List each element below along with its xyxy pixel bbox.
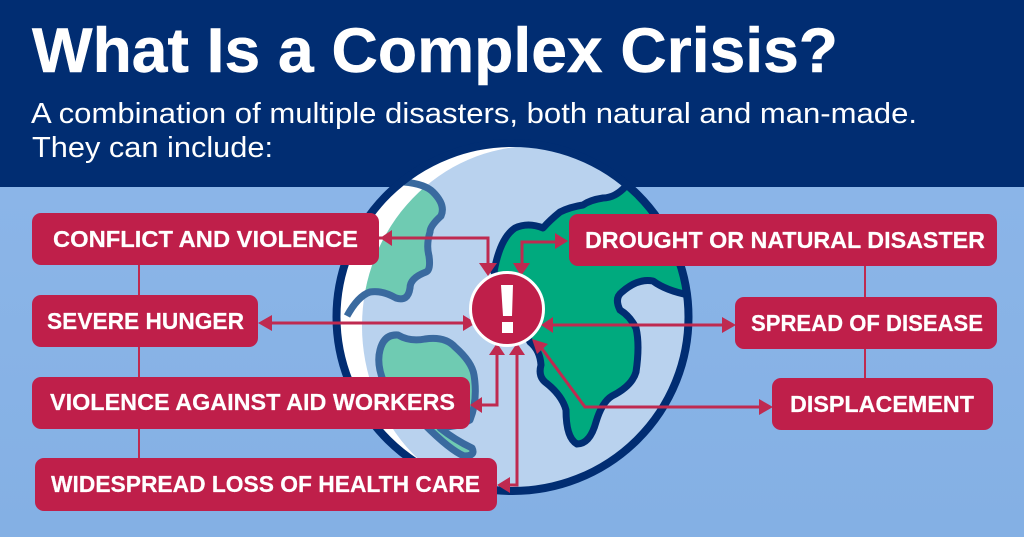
continent: upper left [366,190,439,296]
label: drought or natural disaster [569,214,997,266]
label: severe hunger [32,295,258,347]
globe ocean [362,147,684,487]
subtitle: They can include: [32,132,273,164]
subtitle [31,98,917,164]
arrow: conflict and violence [378,230,497,276]
label: spread of disease: SPREAD OF DISEASE [751,310,983,336]
alert icon [470,272,544,346]
label: violence against aid workers [32,377,470,429]
arrow: spread of disease [541,317,736,333]
connector: right labels [864,262,866,382]
arrow: severe hunger [258,315,476,331]
arrow: displacement [532,339,773,415]
globe [330,143,710,506]
label: severe hunger: SEVERE HUNGER [47,308,244,334]
arrow: violence against aid workers [470,343,505,413]
label: spread of disease [735,297,997,349]
label: drought or natural disaster: DROUGHT OR NATURAL DISASTER [585,227,985,253]
continent: right [494,186,710,444]
label: displacement: DISPLACEMENT [790,391,974,417]
continent: lower left [379,335,475,456]
arrow: widespread loss of health care [497,343,525,493]
label: conflict and violence: CONFLICT AND VIOLENCE [53,226,358,252]
header band [0,0,1024,187]
arrow: drought or natural disaster [513,233,568,276]
label: conflict and violence [32,213,379,265]
subtitle: A combination of multiple disasters, both natural and man-made. [31,98,917,130]
label: violence against aid workers: VIOLENCE AGAINST AID WORKERS [50,389,455,415]
title: What Is a Complex Crisis? [32,16,838,86]
label: widespread loss of health care: WIDESPREAD LOSS OF HEALTH CARE [51,471,480,497]
label: displacement [772,378,993,430]
label: widespread loss of health care [35,458,497,511]
connector: left labels [138,260,140,460]
